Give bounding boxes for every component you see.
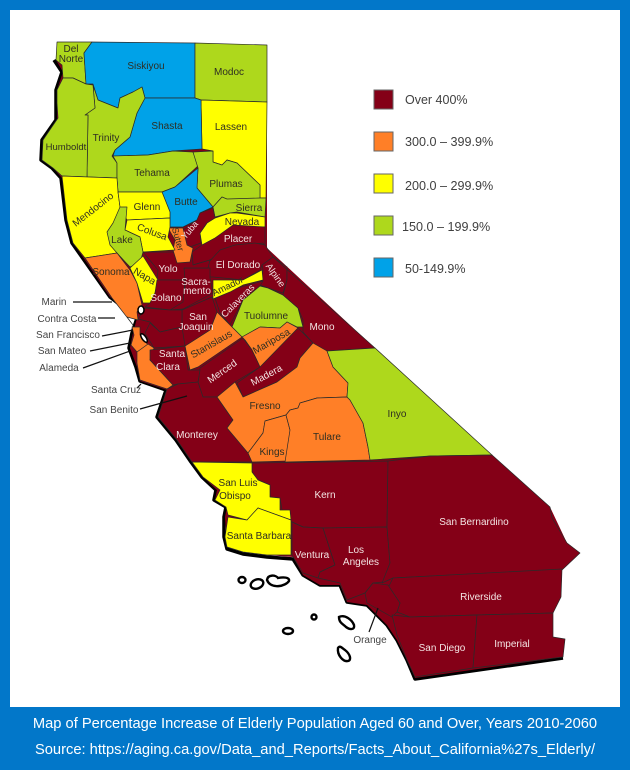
county: San Francisco and San Mateo	[131, 327, 148, 352]
county names: Joaquin	[178, 322, 214, 333]
county names: Los	[348, 545, 364, 556]
county: Napa	[130, 256, 158, 303]
county: Placer	[192, 225, 265, 265]
county names: Monterey	[176, 430, 218, 441]
county: Santa Barbara	[225, 508, 291, 555]
channel islands	[238, 576, 354, 661]
county names: Angeles	[343, 557, 379, 568]
county: Glenn	[118, 192, 170, 220]
county: Tehama	[113, 151, 199, 192]
county names: Riverside	[460, 592, 502, 603]
county names: Mendocino	[71, 190, 116, 229]
county names: Lassen	[215, 122, 247, 133]
county: Santa Clara	[150, 346, 200, 385]
county names: San Luis	[219, 478, 257, 489]
county: Alameda	[145, 323, 185, 348]
county names: mento	[183, 286, 211, 297]
county: Contra Costa	[138, 308, 182, 332]
legend item: over 400%	[374, 90, 468, 109]
state underlay	[42, 42, 580, 678]
county names: Sierra	[236, 203, 263, 214]
county: Alpine	[260, 257, 287, 293]
county: Butte	[162, 168, 213, 227]
county names: Humboldt	[46, 142, 87, 153]
county names: Santa Cruz	[91, 385, 141, 396]
county names: Lake	[111, 235, 133, 246]
legend item: over 400%: Over 400%	[405, 93, 468, 107]
county names: Shasta	[151, 121, 183, 132]
county: Inyo	[327, 348, 492, 460]
coast shadow	[41, 60, 563, 679]
legend item: 50 to 149.9%: 50-149.9%	[405, 262, 465, 276]
county names: Orange	[353, 635, 387, 646]
county names: San Diego	[419, 643, 466, 654]
legend item: 150.0 to 199.9%	[374, 216, 490, 235]
county names: Tulare	[313, 432, 341, 443]
county names: Mono	[309, 322, 335, 333]
county names: Plumas	[209, 179, 243, 190]
legend item: 200.0 to 299.9%	[374, 174, 493, 193]
legend item: 200.0 to 299.9%: 200.0 – 299.9%	[405, 179, 493, 193]
county: Tulare	[285, 397, 370, 462]
county: San Diego	[392, 615, 477, 677]
county: Madera	[237, 328, 313, 397]
county names: El Dorado	[216, 260, 261, 271]
county: San Bernardino	[382, 455, 580, 583]
county names: Kern	[314, 490, 336, 501]
county: Modoc	[195, 43, 267, 102]
county names: Del	[63, 44, 79, 55]
county names: Norte	[59, 54, 84, 65]
legend item: 50 to 149.9%	[374, 258, 465, 277]
legend item: 300.0 to 399.9%: 300.0 – 399.9%	[405, 135, 493, 149]
county fills	[42, 42, 580, 677]
county: Ventura	[292, 522, 335, 578]
county: Del Norte	[56, 42, 92, 84]
county: Sutter	[168, 228, 193, 263]
county names: Solano	[150, 293, 182, 304]
county: San Luis Obispo	[192, 462, 291, 520]
caption: map title: Map of Percentage Increase of Elderly Population Aged 60 and Over, Years 2010-2060	[33, 716, 597, 732]
county names: Sutter	[170, 226, 186, 252]
county names: Sonoma	[92, 267, 130, 278]
county: Mendocino	[62, 176, 125, 258]
county: Sacramento	[170, 268, 213, 310]
county: Tuolumne	[232, 286, 303, 337]
county names: Trinity	[93, 133, 119, 144]
county names: Amador	[211, 275, 245, 299]
county names: Siskiyou	[127, 61, 165, 72]
county names: Mariposa	[251, 327, 293, 357]
county: Shasta	[113, 98, 202, 156]
county names: Inyo	[388, 409, 407, 420]
legend item: 150.0 to 199.9%: 150.0 – 199.9%	[402, 220, 490, 234]
county names: Ventura	[295, 550, 330, 561]
county names: Madera	[249, 363, 285, 389]
county names: Butte	[174, 197, 198, 208]
county: Mono	[273, 257, 375, 351]
county names: Sacra-	[181, 277, 211, 288]
county: Yuba	[183, 208, 215, 248]
county: Colusa	[125, 218, 175, 252]
county: Amador	[213, 270, 263, 299]
county names: Clara	[156, 362, 180, 373]
county names: Stanislaus	[189, 329, 234, 361]
county: Plumas	[193, 151, 260, 207]
county names: Placer	[224, 234, 253, 245]
county: Los Angeles	[318, 527, 390, 600]
county label leader lines	[73, 302, 378, 632]
caption: source: Source: https://aging.ca.gov/Data_and_Reports/Facts_About_California%27s_Elderly/	[35, 742, 595, 758]
county: Riverside	[388, 569, 562, 617]
county: El Dorado	[208, 243, 273, 280]
county names: Colusa	[135, 222, 169, 243]
county: Yolo	[143, 252, 210, 280]
county names: Kings	[259, 447, 285, 458]
county: Sierra	[213, 197, 266, 217]
county names: Yolo	[158, 264, 178, 275]
county: Trinity	[85, 85, 145, 178]
county names: Merced	[206, 358, 239, 386]
county: Stanislaus	[185, 312, 242, 370]
county: Merced	[198, 338, 260, 397]
county: Humboldt	[42, 78, 95, 177]
county names: San Benito	[90, 405, 139, 416]
county names: San Mateo	[38, 346, 87, 357]
bay water	[138, 306, 149, 343]
county: Sonoma and Marin	[85, 253, 142, 325]
county: Solano	[145, 280, 185, 310]
county: Calaveras	[215, 281, 263, 325]
county names: Tehama	[134, 168, 170, 179]
county: Fresno	[217, 343, 348, 453]
county names: San Francisco	[36, 330, 100, 341]
county names: Glenn	[134, 202, 160, 213]
county names: Marin	[41, 297, 67, 308]
county: Orange	[365, 583, 400, 617]
county: Imperial	[473, 613, 565, 668]
county names: Calaveras	[219, 282, 257, 320]
county names: Modoc	[214, 67, 244, 78]
county names: Santa Barbara	[227, 531, 292, 542]
county: Siskiyou	[84, 42, 195, 108]
county: Nevada	[200, 213, 265, 245]
county names: Nevada	[225, 217, 260, 228]
county names: Obispo	[219, 491, 251, 502]
county: Lassen	[201, 100, 267, 198]
county names: Yuba	[179, 219, 200, 241]
county names: Fresno	[249, 401, 281, 412]
county: Mariposa	[242, 322, 298, 367]
county names: Imperial	[494, 639, 530, 650]
county names: San Bernardino	[439, 517, 509, 528]
county: San Benito and Monterey	[158, 382, 252, 462]
county names: Santa	[159, 349, 186, 360]
county names: Contra Costa	[38, 314, 97, 325]
county: Lake	[107, 207, 143, 267]
county: San Joaquin	[182, 297, 217, 346]
county names: Napa	[131, 266, 158, 288]
county: Kern	[252, 461, 388, 528]
county names: San	[189, 312, 207, 323]
county names	[36, 44, 530, 654]
county names: Tuolumne	[244, 311, 288, 322]
legend item: 300.0 to 399.9%	[374, 132, 493, 151]
legend	[374, 90, 493, 277]
county: Kings	[248, 415, 290, 462]
county names: Alpine	[263, 262, 287, 290]
county names: Alameda	[39, 363, 79, 374]
county: Santa Cruz	[137, 344, 173, 389]
